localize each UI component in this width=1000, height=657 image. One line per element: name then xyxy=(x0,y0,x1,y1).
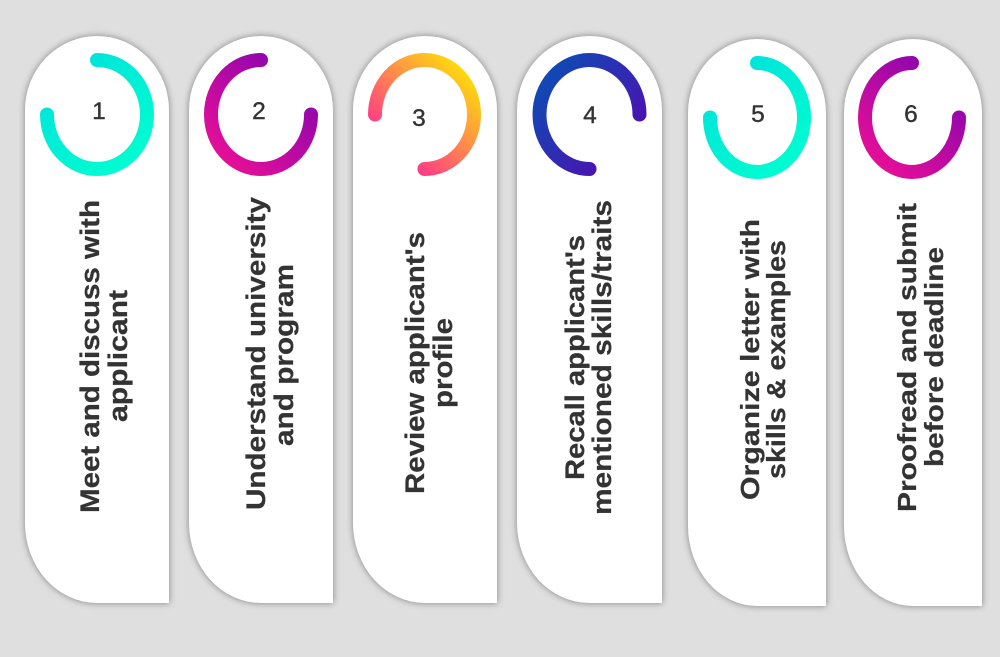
text: step 2 label: and program xyxy=(269,264,299,446)
panel: step 2 xyxy=(189,36,333,603)
icon: ring 5 xyxy=(710,63,804,172)
card 6 background xyxy=(844,39,982,606)
card 4 background xyxy=(517,36,662,603)
panel: step 6 xyxy=(844,39,982,606)
number 2: 2 xyxy=(252,98,266,125)
text: step 5 label: Organize letter with xyxy=(735,219,765,500)
card 2 background xyxy=(189,36,333,603)
text: step 1 label xyxy=(75,200,133,513)
number 4: 4 xyxy=(583,102,597,129)
text: step 3 label: Review applicant's xyxy=(400,232,430,494)
text: step 1 label: applicant xyxy=(103,290,133,422)
panel: step 5 xyxy=(688,39,826,606)
panel: step 1 xyxy=(25,36,169,603)
panel: step 3 xyxy=(353,36,497,603)
text: step 4 label: mentioned skills/traits xyxy=(587,200,617,515)
text: step 5 label: skills & examples xyxy=(761,240,791,479)
number 5: 5 xyxy=(751,101,765,128)
text: step 3 label: profile xyxy=(428,318,458,408)
text: step 1 label: Meet and discuss with xyxy=(75,200,105,513)
text: step 6 label xyxy=(892,203,949,512)
text: step 4 label xyxy=(560,200,617,515)
text: step 6 label: before deadline xyxy=(919,247,949,467)
text: step 3 label xyxy=(400,232,458,494)
icon: ring 1 xyxy=(47,60,147,169)
icon: ring 6 xyxy=(865,63,959,172)
text: step 4 label: Recall applicant's xyxy=(560,235,590,480)
card 5 background xyxy=(688,39,826,606)
text: step 6 label: Proofread and submit xyxy=(892,203,922,512)
number 6: 6 xyxy=(904,101,918,128)
number 1: 1 xyxy=(92,98,106,125)
panel: step 4 xyxy=(517,36,662,603)
number 3: 3 xyxy=(412,105,426,132)
text: step 5 label xyxy=(735,219,791,500)
card 1 background xyxy=(25,36,169,603)
icon: ring 3 xyxy=(375,60,474,169)
icon: ring 2 xyxy=(211,60,311,169)
card 3 background xyxy=(353,36,497,603)
text: step 2 label: Understand university xyxy=(241,197,271,510)
icon: ring 4 xyxy=(540,60,640,169)
text: step 2 label xyxy=(241,197,299,510)
